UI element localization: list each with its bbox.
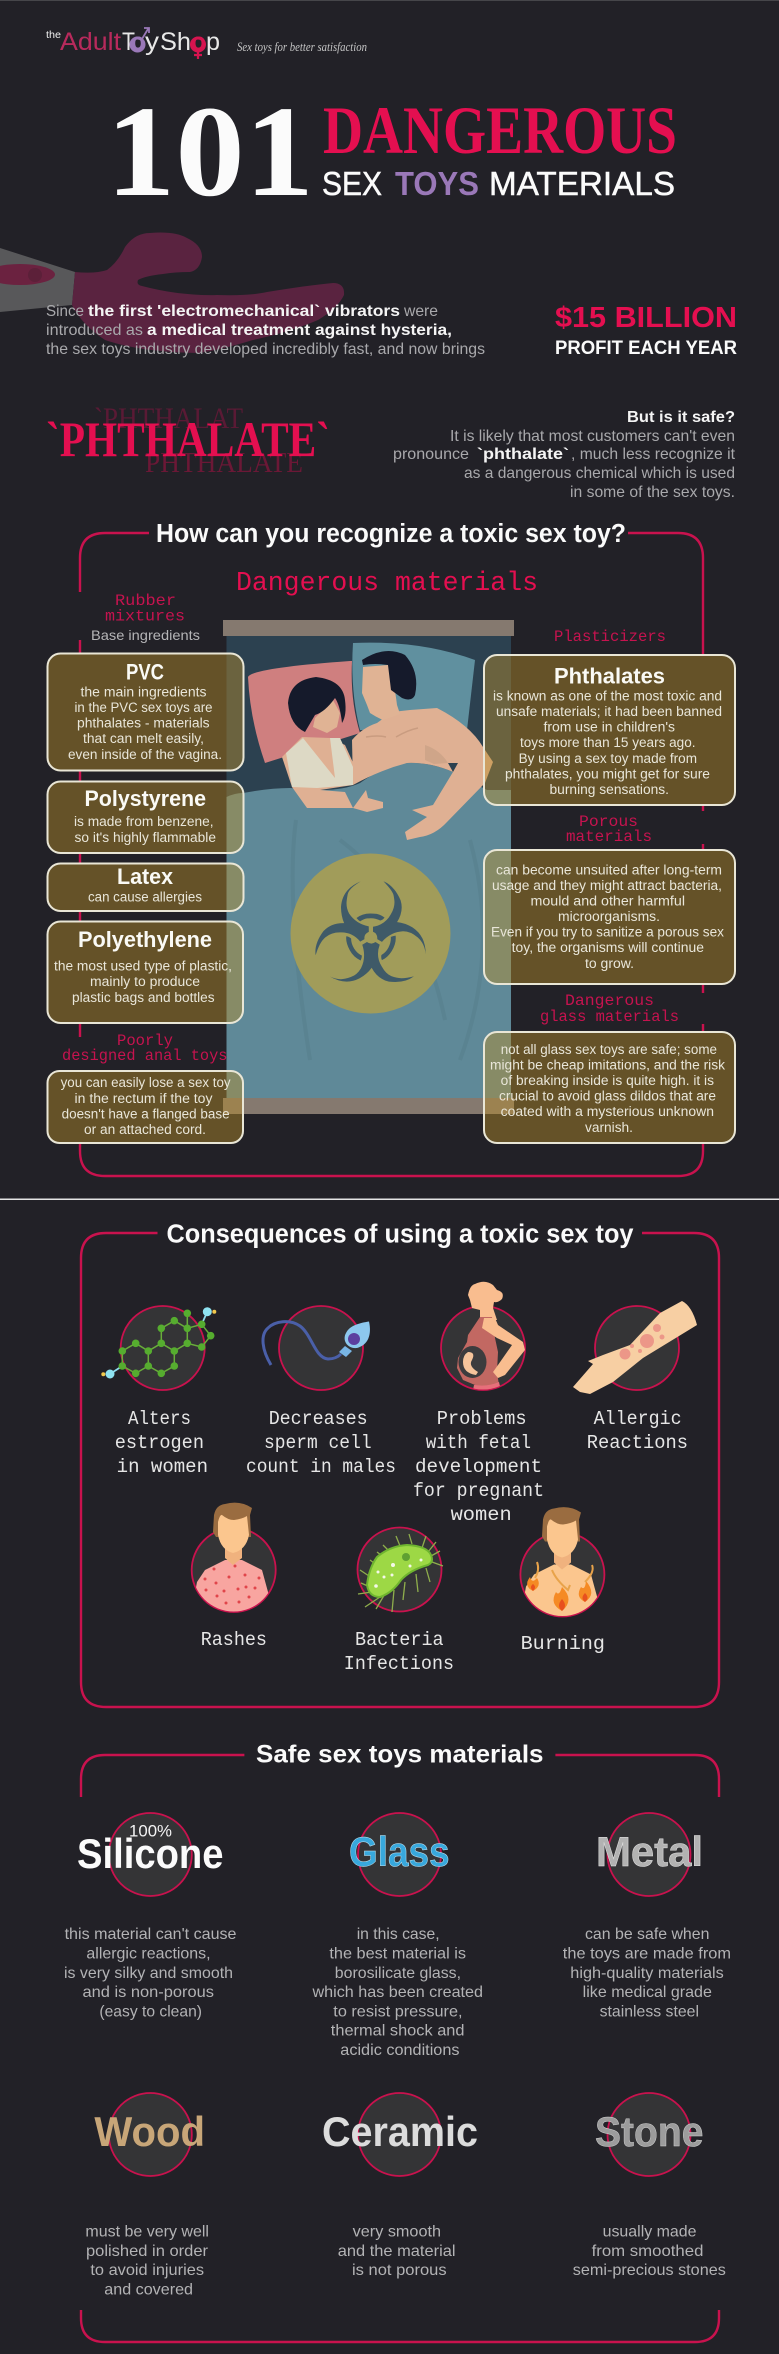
card: porous materials: usage and they might attract bacteria, xyxy=(492,878,722,893)
item: alters estrogen xyxy=(101,1306,216,1478)
material: metal: the toys are made from xyxy=(563,1946,731,1962)
material: metal xyxy=(563,1813,731,2020)
item: fetal development: women xyxy=(451,1504,512,1526)
card: porous materials xyxy=(484,850,735,984)
material: silicone: 100% xyxy=(129,1821,172,1840)
card: PVC: PVC xyxy=(126,660,164,685)
material: ceramic xyxy=(322,2093,478,2279)
panel: safe materials xyxy=(64,1741,731,2342)
card: polystyrene: so it's highly flammable xyxy=(74,830,216,845)
title: TOYS xyxy=(395,165,479,202)
card: anal toys: doesn't have a flanged base xyxy=(62,1106,230,1122)
material: glass: Glass xyxy=(349,1828,450,1875)
card: phthalates: Phthalates xyxy=(554,664,665,688)
label: rubber mixtures: Base ingredients xyxy=(91,627,200,643)
material: metal: stainless steel xyxy=(600,2004,699,2020)
item: decreases sperm: sperm cell xyxy=(264,1432,372,1454)
material: silicone: and is non-porous xyxy=(82,1984,214,2001)
card: phthalates: is known as one of the most toxic and xyxy=(493,688,722,703)
text: but is it safe: pronounce xyxy=(393,446,469,463)
card: porous materials: toy, the organisms will continue xyxy=(512,940,704,955)
item: bacteria infections xyxy=(344,1528,454,1675)
text: but is it safe: But is it safe? xyxy=(627,409,735,426)
card: glass: varnish. xyxy=(585,1120,633,1135)
material: glass: acidic conditions xyxy=(340,2042,460,2059)
text: but is it safe: `phthalate` xyxy=(477,446,569,463)
label: plasticizers: Plasticizers xyxy=(554,628,666,646)
label: porous materials: Porous xyxy=(579,813,638,831)
icon: vibrator toy xyxy=(0,233,344,353)
item: bacteria infections: Bacteria xyxy=(355,1629,444,1651)
title xyxy=(106,80,677,224)
material: glass: in this case, xyxy=(357,1926,440,1943)
panel: how to recognize a toxic sex toy xyxy=(48,520,735,1176)
card: polyethylene xyxy=(48,922,243,1023)
material: silicone xyxy=(64,1813,237,2020)
item: allergic reactions xyxy=(573,1301,697,1454)
label: dangerous glass materials: Dangerous xyxy=(565,992,654,1010)
card: PVC: in the PVC sex toys are xyxy=(74,700,212,715)
card: phthalates: unsafe materials; it had been banned xyxy=(496,704,722,719)
item: rashes: Rashes xyxy=(201,1629,267,1651)
material: glass: borosilicate glass, xyxy=(335,1965,461,1982)
item: fetal development: with fetal xyxy=(426,1432,531,1454)
material: stone xyxy=(573,2093,726,2279)
logo: the Adult Toy Shop xyxy=(46,28,220,59)
card: polyethylene: the most used type of plastic, xyxy=(54,958,232,974)
material: ceramic: is not porous xyxy=(352,2262,447,2279)
card: glass xyxy=(484,1032,735,1143)
card: PVC: even inside of the vagina. xyxy=(68,747,222,762)
card: latex xyxy=(48,864,244,911)
card: anal toys: in the rectum if the toy xyxy=(74,1091,213,1106)
intro paragraph: a medical treatment against hysteria, xyxy=(147,322,452,339)
card: phthalates: burning sensations. xyxy=(550,782,669,797)
material: glass: the best material is xyxy=(329,1946,466,1962)
item: alters estrogen: in women xyxy=(117,1456,208,1478)
material: wood: and covered xyxy=(104,2281,193,2298)
logo: the Adult Toy Shop: T xyxy=(122,28,135,56)
card: porous materials: mould and other harmful xyxy=(530,894,685,908)
card: anal toys: you can easily lose a sex toy xyxy=(61,1075,231,1090)
text: but is it safe: as a dangerous chemical which is used xyxy=(464,465,735,482)
label: rubber mixtures: Rubber xyxy=(115,592,176,610)
logo: the Adult Toy Shop: the xyxy=(46,30,61,41)
item: fetal development: Problems xyxy=(437,1408,527,1430)
material: glass: to resist pressure, xyxy=(333,2004,462,2020)
card: latex: Latex xyxy=(117,864,174,889)
card: porous materials: microorganisms. xyxy=(558,909,660,924)
item: allergic reactions: Reactions xyxy=(587,1432,688,1454)
item: alters estrogen: Alters xyxy=(128,1408,191,1430)
label: porous materials xyxy=(566,813,652,846)
material: silicone: (easy to clean) xyxy=(99,2004,202,2020)
intro paragraph xyxy=(46,303,485,358)
card: phthalates: from use in children's xyxy=(544,720,675,735)
label: rubber mixtures xyxy=(91,592,200,643)
panel: consequences xyxy=(81,1221,719,1707)
stat: 15 billion profit xyxy=(555,302,737,359)
stat: 15 billion profit: $15 BILLION xyxy=(555,302,737,334)
material: ceramic: Ceramic xyxy=(322,2108,478,2155)
material: stone: semi-precious stones xyxy=(573,2262,726,2279)
card: polyethylene: plastic bags and bottles xyxy=(72,990,215,1005)
item: alters estrogen: estrogen xyxy=(115,1432,204,1454)
icon: biohazard: ☣ xyxy=(309,854,432,1015)
item: decreases sperm: count in males xyxy=(246,1456,396,1478)
label: poorly designed anal toys xyxy=(62,1032,228,1065)
card: polyethylene: mainly to produce xyxy=(90,974,200,989)
heading: consequences: Consequences of using a toxic sex toy xyxy=(166,1221,634,1249)
material: ceramic: and the material xyxy=(338,2243,455,2260)
text: but is it safe xyxy=(393,409,736,501)
card: glass: not all glass sex toys are safe; some xyxy=(501,1042,717,1057)
item: burning: Burning xyxy=(521,1633,605,1655)
text: but is it safe: in some of the sex toys. xyxy=(570,484,735,501)
material: ceramic: very smooth xyxy=(353,2223,441,2240)
material: metal: high-quality materials xyxy=(570,1965,724,1982)
intro paragraph: the sex toys industry developed incredibly fast, and now brings xyxy=(46,341,485,358)
card: porous materials: Even if you try to sanitize a porous sex xyxy=(491,925,724,940)
intro paragraph: Since xyxy=(46,303,84,320)
card: anal toys xyxy=(48,1071,243,1143)
card: porous materials: can become unsuited after long-term xyxy=(496,862,722,877)
item: fetal development: development xyxy=(415,1456,542,1478)
bed frame bars xyxy=(223,620,514,1114)
card: glass: crucial to avoid glass dildos that are xyxy=(499,1089,716,1104)
phthalate wordmark: `PHTHALAT xyxy=(94,402,243,435)
material: stone: usually made xyxy=(603,2223,697,2240)
material: silicone: this material can't cause xyxy=(65,1926,237,1943)
text: but is it safe: It is likely that most customers can't even xyxy=(450,428,735,445)
stat: 15 billion profit: PROFIT EACH YEAR xyxy=(555,338,737,359)
card: PVC: the main ingredients xyxy=(80,684,207,700)
logo: the Adult Toy Shop: o xyxy=(131,28,145,56)
material: silicone: allergic reactions, xyxy=(86,1946,211,1962)
material: silicone: is very silky and smooth xyxy=(64,1965,233,1982)
material: wood: must be very well xyxy=(85,2223,209,2240)
label: poorly designed anal toys: designed anal toys xyxy=(62,1047,228,1065)
material: stone: from smoothed xyxy=(592,2243,703,2260)
material: metal: like medical grade xyxy=(583,1984,712,2001)
logo: the Adult Toy Shop: Adult xyxy=(60,28,121,56)
card: glass: of breaking inside is quite high. it is xyxy=(501,1073,714,1088)
logo: the Adult Toy Shop: p xyxy=(206,28,220,56)
card: polyethylene: Polyethylene xyxy=(78,927,212,952)
phthalate wordmark: `PHTHALATE` xyxy=(46,411,330,467)
material: wood xyxy=(85,2093,209,2298)
item: rashes xyxy=(190,1503,276,1651)
intro paragraph: the first 'electromechanical` vibrators xyxy=(88,303,400,320)
item: fetal development xyxy=(413,1282,544,1526)
heading: how can you recognize: How can you recognize a toxic sex toy? xyxy=(156,520,626,548)
item: fetal development: for pregnant xyxy=(413,1480,544,1502)
card: phthalates: toys more than 15 years ago. xyxy=(520,735,696,750)
card: anal toys: or an attached cord. xyxy=(84,1122,206,1137)
card: PVC: phthalates - materials xyxy=(77,716,210,731)
label: dangerous glass materials xyxy=(540,992,679,1026)
title: 101 xyxy=(106,80,314,224)
label: dangerous glass materials: glass materials xyxy=(540,1008,679,1026)
title: MATERIALS xyxy=(489,165,675,202)
material: silicone: Silicone xyxy=(77,1830,224,1877)
title: DANGEROUS xyxy=(323,92,677,168)
phthalate wordmark: PHTHALATE xyxy=(145,448,303,479)
intro paragraph: were xyxy=(403,303,438,320)
tagline: Sex toys for better satisfaction xyxy=(237,39,367,54)
card: glass: might be cheap imitations, and the risk xyxy=(490,1058,725,1072)
material: wood: to avoid injuries xyxy=(90,2262,204,2279)
card: PVC xyxy=(48,654,244,770)
material: glass: thermal shock and xyxy=(331,2023,464,2040)
material: stone: Stone xyxy=(595,2108,703,2155)
card: phthalates xyxy=(484,655,735,805)
material: metal: Metal xyxy=(596,1828,703,1875)
label: porous materials: materials xyxy=(566,828,652,846)
material: glass: which has been created xyxy=(311,1984,483,2001)
item: allergic reactions: Allergic xyxy=(594,1408,682,1430)
phthalate wordmark xyxy=(46,402,330,479)
card: polystyrene xyxy=(48,782,244,853)
title: SEX xyxy=(322,165,382,202)
material: glass xyxy=(311,1813,483,2059)
logo: the Adult Toy Shop: y xyxy=(145,28,160,56)
item: bacteria infections: Infections xyxy=(344,1653,454,1675)
item: burning xyxy=(519,1507,605,1655)
heading: dangerous materials: Dangerous materials xyxy=(236,568,538,598)
card: latex: can cause allergies xyxy=(88,890,202,905)
card: glass: coated with a mysterious unknown xyxy=(501,1104,714,1119)
logo: the Adult Toy Shop: o xyxy=(191,28,206,56)
illustration: couple in bed xyxy=(226,636,511,1098)
text: but is it safe: , much less recognize it xyxy=(571,446,736,463)
intro paragraph: introduced as xyxy=(46,322,143,339)
material: wood: Wood xyxy=(94,2108,205,2155)
card: phthalates: phthalates, you might get for sure xyxy=(505,766,710,782)
item: decreases sperm: Decreases xyxy=(269,1408,368,1430)
material: wood: polished in order xyxy=(86,2243,209,2260)
card: porous materials: to grow. xyxy=(585,956,634,971)
card: polystyrene: Polystyrene xyxy=(84,786,206,811)
card: PVC: that can melt easily, xyxy=(83,731,204,746)
label: rubber mixtures: mixtures xyxy=(105,608,185,626)
material: metal: can be safe when xyxy=(585,1926,709,1943)
card: polystyrene: is made from benzene, xyxy=(74,814,214,829)
label: poorly designed anal toys: Poorly xyxy=(117,1032,173,1050)
item: decreases sperm xyxy=(246,1306,396,1478)
heading: safe materials: Safe sex toys materials xyxy=(256,1741,544,1769)
card: phthalates: By using a sex toy made from xyxy=(519,751,697,766)
logo: the Adult Toy Shop: Sh xyxy=(160,28,191,56)
